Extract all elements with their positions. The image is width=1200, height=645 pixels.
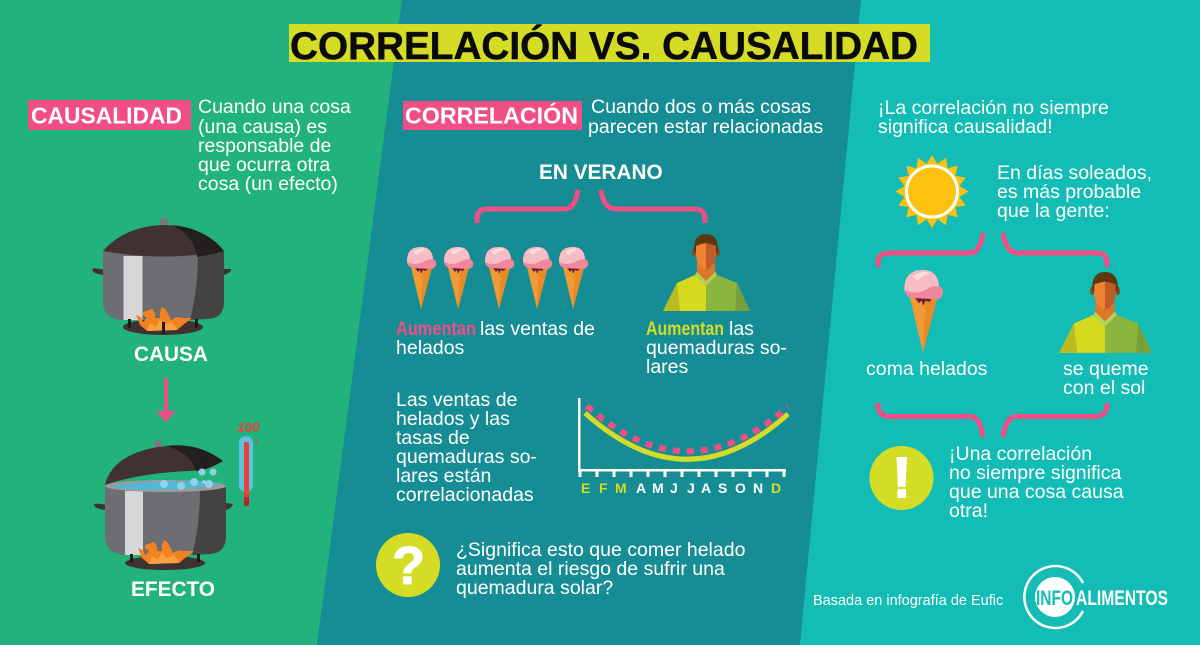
text: sunburn rises: las <box>729 318 754 340</box>
text: correlation statement <box>396 389 537 506</box>
label: get sunburned: con el sol <box>1063 377 1145 399</box>
correlacion definition: parecen estar relacionadas <box>588 116 823 138</box>
correlacion definition: Cuando dos o más cosas <box>591 96 811 118</box>
text: sunny days <box>997 162 1152 222</box>
bracket: sun to sunburn <box>1003 233 1107 267</box>
icon: sun <box>896 155 968 228</box>
chart: seasonal curves: J <box>687 480 695 496</box>
icon: pot with closed lid <box>92 218 231 335</box>
panel: conclusion background <box>800 0 1200 645</box>
causalidad definition: (una causa) es <box>198 116 327 138</box>
text: sunburn rises: lares <box>646 356 689 378</box>
icon: question mark: ? <box>392 536 425 596</box>
text: sunny days: es más probable <box>997 181 1141 203</box>
arrow: cause to effect <box>156 378 176 422</box>
label: eat ice cream: coma helados <box>866 358 988 380</box>
text: correlation warning <box>878 97 1109 138</box>
icon: person <box>1059 272 1152 353</box>
text: sunny days: En días soleados, <box>997 162 1152 184</box>
chart: seasonal curves: A <box>636 480 646 496</box>
label: get sunburned: se queme <box>1063 358 1149 380</box>
chart: seasonal curves: F <box>599 480 608 496</box>
logo: infoalimentos: ALIMENTOS <box>1076 587 1168 610</box>
text: question: quemadura solar? <box>456 577 613 599</box>
text: sunburn rises <box>646 318 787 378</box>
text: ice cream sales rise <box>396 318 595 359</box>
title: CORRELACIÓN VS. CAUSALIDAD <box>290 24 918 68</box>
chart: seasonal curves <box>578 398 788 496</box>
text: correlation statement: tasas de <box>396 427 470 449</box>
text: conclusion <box>949 443 1124 522</box>
chart: seasonal curves: D <box>771 480 781 496</box>
text: ice cream sales rise: Aumentan <box>396 318 476 340</box>
text: conclusion: que una cosa causa <box>949 481 1124 503</box>
icon: thermometer <box>237 420 260 506</box>
bracket: ice cream to warning <box>878 403 983 437</box>
bracket: summer to sunburn <box>601 190 705 223</box>
logo: infoalimentos <box>1024 566 1168 628</box>
text: question: ¿Significa esto que comer helado <box>456 539 746 561</box>
credit: Basada en infografía de Eufic <box>813 593 1003 609</box>
text: correlation statement: correlacionadas <box>396 484 534 506</box>
logo: infoalimentos: INFO <box>1036 587 1073 610</box>
label: efecto: EFECTO <box>131 578 215 601</box>
panel: correlacion background <box>317 0 861 645</box>
chart: seasonal curves: A <box>701 480 711 496</box>
text: conclusion: otra! <box>949 500 988 522</box>
icon: exclamation mark <box>870 446 934 510</box>
text: ice cream sales rise: las ventas de <box>480 318 595 340</box>
icon: ice cream <box>904 270 943 352</box>
chart: seasonal curves: M <box>615 480 627 496</box>
badge: causalidad: CAUSALIDAD <box>31 102 182 128</box>
chart: seasonal curves: O <box>735 480 746 496</box>
text: correlation statement: helados y las <box>396 408 510 430</box>
correlacion definition <box>588 96 823 138</box>
text: conclusion: no siempre significa <box>949 462 1121 484</box>
causalidad definition: que ocurra otra <box>198 154 330 176</box>
icon: person <box>663 234 750 311</box>
badge: correlacion: CORRELACIÓN <box>405 101 578 128</box>
label: get sunburned <box>1063 358 1149 399</box>
bracket: summer to ice cream <box>477 190 578 223</box>
text: ice cream sales rise: helados <box>396 337 465 359</box>
text: correlation warning: ¡La correlación no siempre <box>878 97 1109 119</box>
text: sunburn rises: quemaduras so- <box>646 337 787 359</box>
bracket: sun to ice cream <box>878 233 983 267</box>
causalidad definition: cosa (un efecto) <box>198 173 338 195</box>
text: correlation statement: lares están <box>396 465 491 487</box>
chart: seasonal curves: M <box>652 480 664 496</box>
bracket: sunburn to warning <box>1003 403 1107 437</box>
label: causa: CAUSA <box>134 343 208 366</box>
chart: seasonal curves: E <box>581 480 590 496</box>
causalidad definition: responsable de <box>198 135 331 157</box>
causalidad definition <box>198 96 351 195</box>
icon: thermometer: 100 <box>237 420 260 435</box>
icons: five ice creams <box>407 247 588 309</box>
text: sunburn rises: Aumentan <box>646 318 724 340</box>
chart: seasonal curves: J <box>670 480 678 496</box>
icon: question mark <box>376 533 440 597</box>
chart: seasonal curves: N <box>753 480 763 496</box>
heading: en verano: EN VERANO <box>539 161 663 184</box>
text: sunny days: que la gente: <box>997 200 1110 222</box>
text: correlation statement: Las ventas de <box>396 389 517 411</box>
icon: boiling pot with open lid <box>94 440 233 570</box>
text: question <box>456 539 746 599</box>
text: conclusion: ¡Una correlación <box>949 443 1092 465</box>
text: correlation statement: quemaduras so- <box>396 446 537 468</box>
chart: seasonal curves: S <box>718 480 727 496</box>
text: correlation warning: significa causalidad! <box>878 116 1053 138</box>
causalidad definition: Cuando una cosa <box>198 96 351 118</box>
text: question: aumenta el riesgo de sufrir una <box>456 558 725 580</box>
